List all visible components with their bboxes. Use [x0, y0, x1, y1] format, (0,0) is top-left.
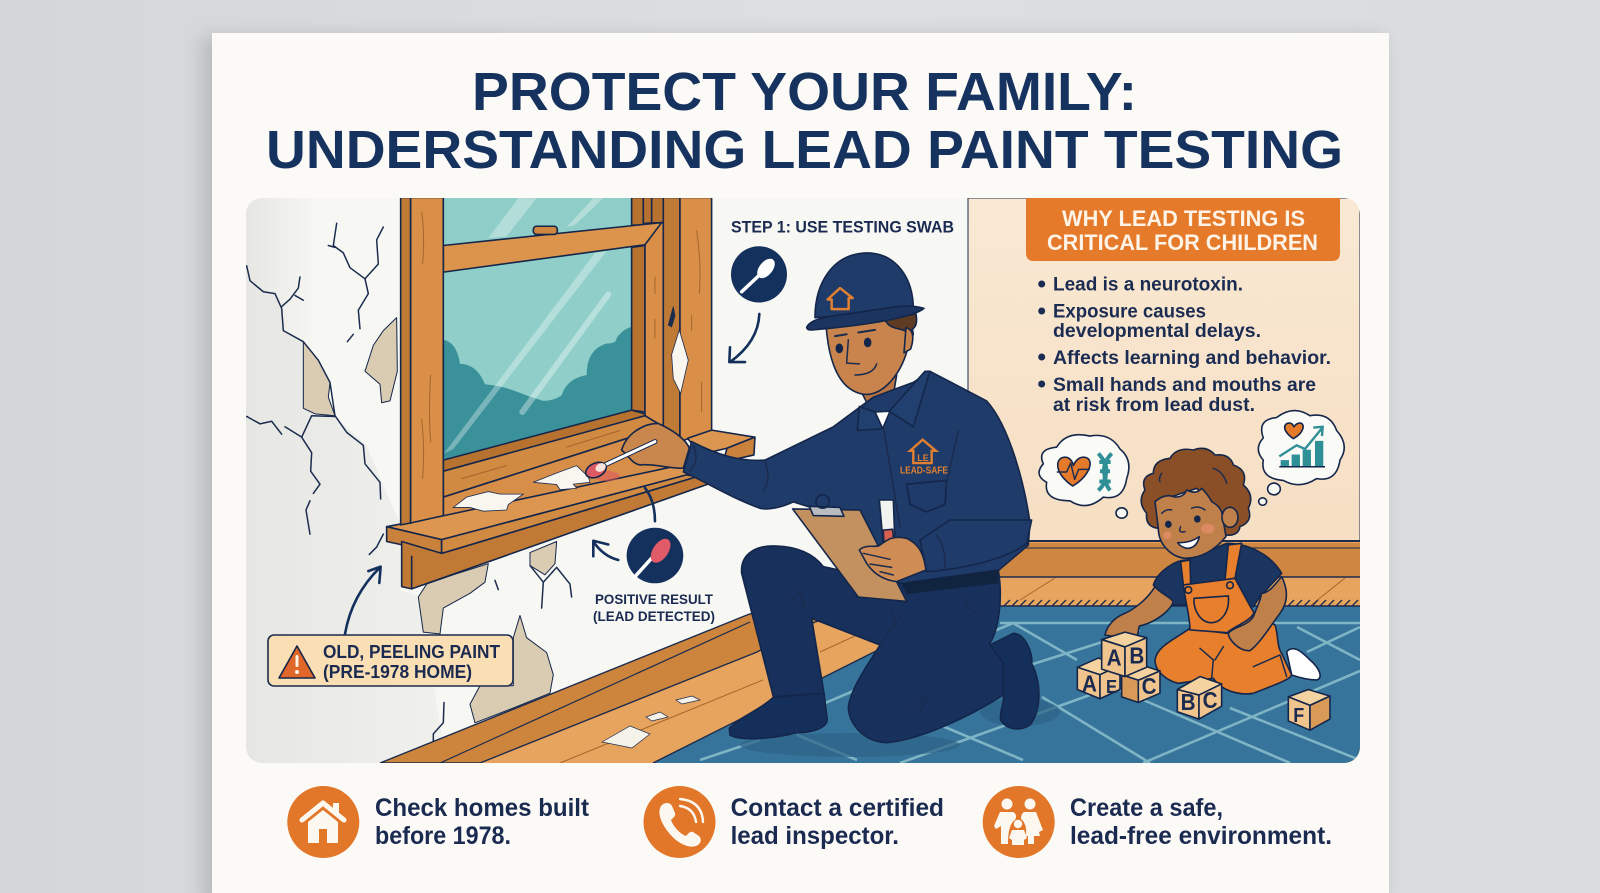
panel heading: why lead testing: CRITICAL FOR CHILDREN — [1047, 230, 1318, 255]
shirt — [683, 371, 1030, 593]
arrow from positive swab — [593, 488, 655, 560]
clipboard — [793, 495, 907, 601]
bullet list: Affects learning and behavior. — [1053, 348, 1331, 369]
tip: contact inspector: Contact a certified — [731, 794, 944, 822]
window — [345, 197, 755, 634]
label: positive result: (LEAD DETECTED) — [593, 608, 715, 624]
alphabet blocks — [1077, 632, 1330, 730]
swab and hand — [584, 423, 689, 481]
collar — [690, 371, 958, 527]
icon: phone — [659, 799, 703, 847]
hand on tube — [859, 537, 926, 582]
wood floor and baseboard — [380, 540, 1360, 763]
tip: check homes — [287, 786, 590, 858]
bullet list: developmental delays. — [1053, 321, 1261, 342]
window frame — [387, 197, 755, 589]
tip: safe environment: Create a safe, — [1070, 794, 1223, 822]
callout: old peeling paint: (PRE-1978 HOME) — [323, 662, 472, 682]
shirt logo — [900, 440, 948, 476]
thought bubble: health — [1039, 435, 1129, 518]
tip: contact inspector: lead inspector. — [731, 822, 899, 850]
alphabet blocks: C — [1203, 687, 1218, 713]
label: positive result: POSITIVE RESULT — [595, 591, 713, 607]
belt — [902, 570, 998, 594]
icon: warning triangle — [279, 646, 315, 678]
overalls bib and straps — [1181, 543, 1254, 633]
peeling paint on sill — [453, 307, 688, 511]
icon: house — [302, 803, 344, 843]
alphabet blocks: A — [1107, 644, 1122, 671]
bullet list: Exposure causes — [1053, 302, 1206, 323]
icon: family — [994, 798, 1043, 845]
boots — [729, 633, 1039, 739]
callout: old peeling paint: OLD, PEELING PAINT — [323, 642, 500, 662]
alphabet blocks: B — [1181, 689, 1196, 715]
rug fringe — [1004, 600, 1358, 606]
title — [266, 62, 1343, 180]
head — [1141, 448, 1251, 558]
alphabet blocks: A — [1082, 670, 1097, 697]
step arrow and swab icon — [729, 246, 787, 362]
alphabet blocks: C — [1142, 673, 1157, 699]
title: PROTECT YOUR FAMILY: — [472, 62, 1137, 122]
icon: positive swab — [627, 528, 683, 583]
sleeve — [920, 520, 1032, 572]
trouser creases — [790, 590, 980, 712]
patterned rug — [653, 606, 1360, 763]
tip: check homes: before 1978. — [375, 822, 511, 850]
arrow from step icon — [729, 314, 759, 362]
left arm — [1105, 587, 1173, 640]
hard hat — [807, 253, 924, 330]
tip: safe environment — [983, 786, 1332, 858]
inspector — [683, 253, 1039, 743]
exposed plaster patches — [303, 318, 557, 723]
child — [1105, 448, 1320, 694]
wood grain — [422, 212, 702, 479]
poster sheet — [202, 33, 1389, 893]
title: UNDERSTANDING LEAD PAINT TESTING — [266, 120, 1343, 180]
label: positive result — [593, 591, 715, 624]
alphabet blocks: E — [1106, 676, 1117, 697]
t-shirt — [1153, 543, 1282, 607]
arrow to peeling paint — [345, 567, 381, 634]
illustration panel — [240, 197, 1360, 767]
shirt logo: LEAD-SAFE — [900, 465, 948, 476]
thought bubble: growth — [1258, 411, 1344, 505]
neck and face — [826, 314, 918, 402]
legs — [1155, 612, 1292, 694]
right arm — [1228, 577, 1286, 651]
wall with cracks — [246, 198, 572, 763]
bullet list — [1038, 275, 1331, 416]
shirt logo: LE — [917, 453, 929, 463]
label: step 1: STEP 1: USE TESTING SWAB — [731, 218, 954, 236]
tip: check homes: Check homes built — [375, 794, 590, 822]
bullet list: Lead is a neurotoxin. — [1053, 275, 1243, 296]
panel heading: why lead testing: WHY LEAD TESTING IS — [1062, 206, 1305, 231]
bullet list: Small hands and mouths are — [1053, 375, 1316, 396]
peach panel — [968, 198, 1360, 543]
bullet list: at risk from lead dust. — [1053, 395, 1255, 416]
tip: safe environment: lead-free environment. — [1070, 822, 1332, 850]
panel heading: why lead testing — [1026, 198, 1340, 261]
icon: testing swab — [731, 246, 787, 302]
cracks — [247, 223, 572, 752]
trousers — [742, 546, 1003, 743]
tip: contact inspector — [644, 786, 944, 858]
callout: old peeling paint — [268, 635, 513, 686]
sock — [1287, 649, 1320, 680]
alphabet blocks: B — [1129, 643, 1144, 669]
child and thought bubbles — [1039, 411, 1344, 730]
window glass — [443, 197, 632, 460]
alphabet blocks: F — [1293, 705, 1304, 727]
test tube — [879, 500, 895, 547]
